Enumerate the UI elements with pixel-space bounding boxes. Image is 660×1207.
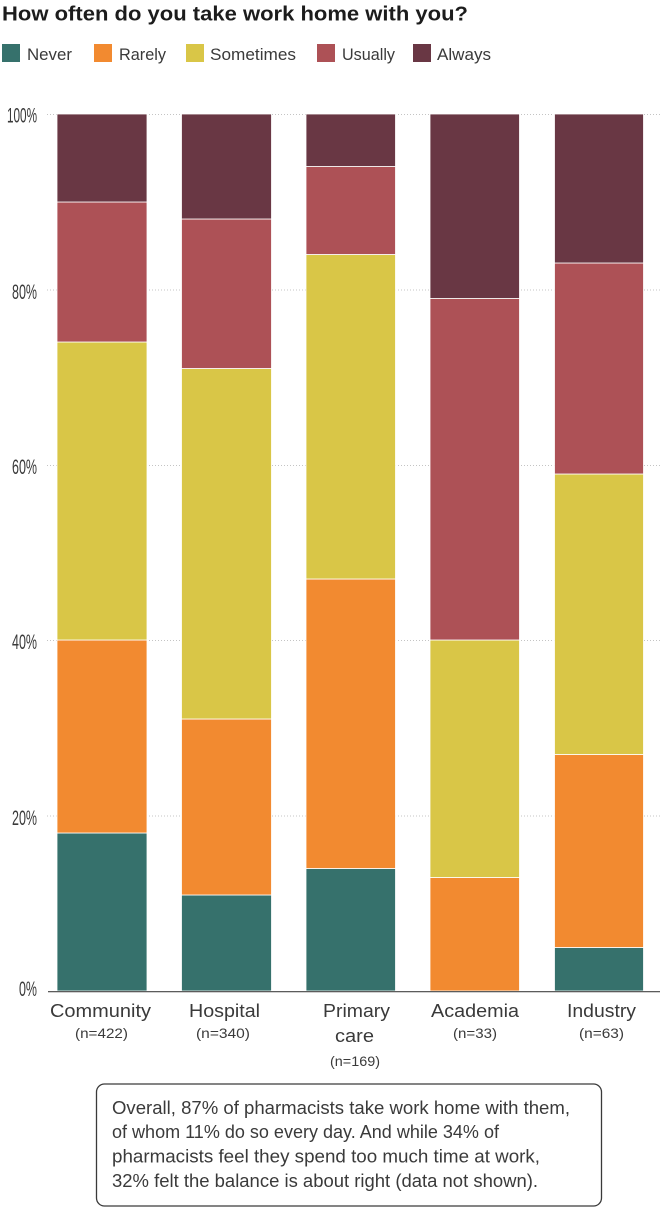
- legend: Always: [437, 45, 491, 64]
- callout: Overall, 87% of pharmacists take work home with them,: [112, 1098, 570, 1118]
- y axis gridlines and labels: 80%: [12, 281, 37, 304]
- legend: Never: [27, 45, 72, 64]
- bar: Hospital: [182, 114, 272, 991]
- x axis category labels: Community: [50, 1001, 151, 1021]
- x axis line: [48, 991, 660, 993]
- x axis category labels: (n=63): [579, 1026, 624, 1041]
- legend: Usually: [342, 45, 395, 64]
- y axis gridlines and labels: 0%: [19, 978, 37, 1001]
- legend: Rarely: [119, 45, 166, 64]
- x axis category labels: Hospital: [189, 1001, 260, 1021]
- bar: Industry: [554, 114, 644, 991]
- bar: Community: [57, 114, 147, 991]
- x axis category labels: Primary: [323, 1001, 390, 1021]
- callout: pharmacists feel they spend too much time at work,: [112, 1146, 540, 1166]
- title: How often do you take work home with you?: [2, 4, 468, 26]
- legend: Sometimes: [210, 45, 296, 64]
- y axis gridlines and labels: 20%: [12, 807, 37, 830]
- bar: Academia: [430, 114, 520, 991]
- x axis category labels: (n=340): [196, 1026, 250, 1041]
- y axis gridlines and labels: 100%: [7, 104, 37, 128]
- x axis category labels: (n=33): [453, 1026, 497, 1041]
- callout: 32% felt the balance is about right (data not shown).: [112, 1171, 538, 1191]
- x axis category labels: Academia: [431, 1001, 520, 1021]
- bar: Primary care: [306, 114, 396, 991]
- stacked bar chart: [57, 114, 644, 991]
- x axis category labels: (n=169): [330, 1054, 380, 1069]
- x axis category labels: care: [335, 1026, 374, 1046]
- callout: [96, 1084, 602, 1206]
- legend: [2, 44, 491, 64]
- x axis category labels: (n=422): [75, 1026, 128, 1041]
- callout: of whom 11% do so every day. And while 34% of: [112, 1122, 500, 1142]
- y axis gridlines and labels: 40%: [12, 631, 37, 654]
- y axis gridlines and labels: [7, 104, 660, 1001]
- y axis gridlines and labels: 60%: [12, 456, 37, 479]
- x axis category labels: [50, 1001, 636, 1069]
- x axis category labels: Industry: [567, 1001, 636, 1021]
